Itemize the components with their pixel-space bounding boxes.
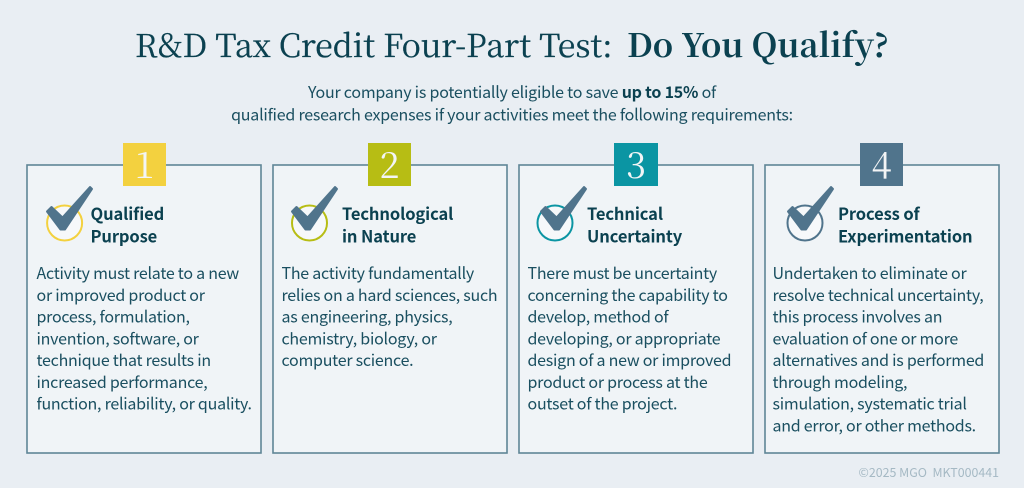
- icon: check in circle: [538, 187, 586, 240]
- copyright: ©2025 MGO MKT000441: [859, 463, 999, 481]
- number badge 3: 3: [626, 138, 646, 189]
- number badge 4: [860, 138, 903, 189]
- number badge 2: [368, 138, 411, 189]
- intro text: [231, 79, 793, 126]
- heading: Experimentation: [838, 224, 973, 248]
- panel: technological in nature: [273, 138, 507, 453]
- description: developing, or appropriate: [528, 325, 721, 349]
- description: concerning the capability to: [528, 282, 728, 306]
- description: The activity fundamentally: [282, 260, 475, 284]
- panel: process of experimentation: [765, 138, 999, 453]
- description: outset of the project.: [528, 390, 677, 414]
- description: technique that results in: [36, 347, 211, 371]
- heading: Technical: [587, 201, 663, 225]
- heading: Uncertainty: [587, 224, 683, 248]
- number badge 2: 2: [380, 138, 399, 189]
- icon: check in circle: [788, 187, 833, 240]
- description: design of a new or improved: [528, 347, 731, 371]
- number badge 4: 4: [872, 138, 892, 189]
- description: chemistry, biology, or: [282, 325, 438, 349]
- description: develop, method of: [528, 304, 669, 328]
- title: R&D Tax Credit Four-Part Test:: [135, 21, 613, 67]
- heading: Technological: [342, 201, 453, 225]
- description: process, formulation,: [36, 304, 190, 328]
- title: Do You Qualify?: [627, 20, 889, 67]
- description: invention, software, or: [36, 325, 200, 349]
- description: computer science.: [282, 347, 413, 371]
- number badge 1: 1: [135, 138, 154, 189]
- panel: qualified purpose: [27, 138, 261, 453]
- description: resolve technical uncertainty,: [772, 282, 984, 306]
- heading: Process of: [838, 201, 921, 225]
- description: increased performance,: [36, 369, 207, 393]
- description: this process involves an: [772, 304, 942, 328]
- description: through modeling,: [772, 369, 907, 393]
- description: alternatives and is performed: [772, 347, 984, 371]
- icon: check in circle: [47, 187, 92, 240]
- heading: Purpose: [90, 224, 157, 248]
- description: or improved product or: [36, 282, 206, 306]
- description: evaluation of one or more: [772, 325, 958, 349]
- heading: in Nature: [342, 224, 416, 248]
- description: There must be uncertainty: [528, 260, 718, 284]
- panel: technical uncertainty: [519, 138, 753, 453]
- description: function, reliability, or quality.: [36, 390, 252, 414]
- description: product or process at the: [528, 369, 708, 393]
- number badge 3: [614, 138, 658, 189]
- intro text: Your company is potentially eligible to save up to 15% of: [307, 79, 717, 103]
- description: as engineering, physics,: [282, 304, 452, 328]
- description: relies on a hard sciences, such: [282, 282, 497, 306]
- description: simulation, systematic trial: [772, 390, 967, 414]
- number badge 1: [123, 138, 166, 189]
- description: Undertaken to eliminate or: [772, 260, 967, 284]
- description: and error, or other methods.: [772, 412, 976, 436]
- description: Activity must relate to a new: [36, 260, 239, 284]
- icon: check in circle: [292, 187, 337, 240]
- heading: Qualified: [90, 201, 164, 225]
- intro text: qualified research expenses if your activities meet the following requirements:: [231, 102, 793, 126]
